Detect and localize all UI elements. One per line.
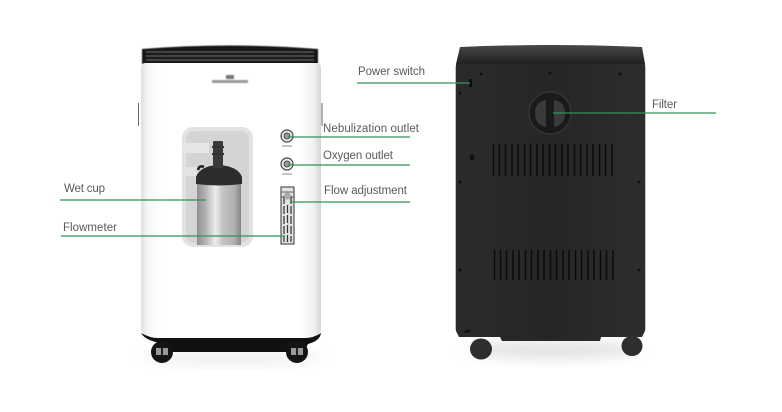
oxygen port: [281, 158, 293, 175]
white body: [141, 63, 321, 337]
water cup window: [182, 127, 253, 247]
nebulization port: [281, 130, 293, 147]
callout: oxygen outlet: Oxygen outlet: [323, 150, 394, 162]
callout: flowmeter: Flowmeter: [63, 222, 117, 234]
back unit: [456, 45, 646, 360]
top vent band: [142, 46, 318, 64]
left wheel: [151, 341, 173, 363]
callout: nebulization outlet: [288, 123, 420, 137]
back body: [456, 64, 645, 341]
callout: flow adjustment: Flow adjustment: [324, 185, 408, 197]
upper vents: [494, 144, 612, 176]
floor shadow: [142, 352, 322, 364]
callout: filter: Filter: [652, 99, 677, 111]
base and wheels: [141, 333, 321, 363]
callout: nebulization outlet: Nebulization outlet: [323, 123, 420, 135]
front unit: [138, 46, 322, 364]
back left wheel: [470, 338, 492, 360]
callout: oxygen outlet: [288, 150, 410, 165]
screw details: [458, 72, 640, 333]
side handles: [138, 103, 322, 126]
flowmeter panel: [281, 187, 294, 244]
body side highlights: [456, 66, 646, 330]
callout: wet cup: Wet cup: [64, 183, 105, 195]
callout: power switch: Power switch: [358, 66, 425, 78]
filter cover: [529, 92, 571, 134]
back top cap: [456, 45, 645, 64]
lower vents: [494, 250, 613, 280]
wet cup bottle: [196, 141, 242, 245]
power switch: [469, 79, 472, 87]
logo: [212, 75, 248, 83]
callout: flow adjustment: [290, 185, 410, 202]
back right wheel: [622, 336, 642, 356]
back floor shadow: [468, 341, 636, 359]
callout: power switch: [357, 66, 470, 83]
right wheel: [286, 341, 308, 363]
